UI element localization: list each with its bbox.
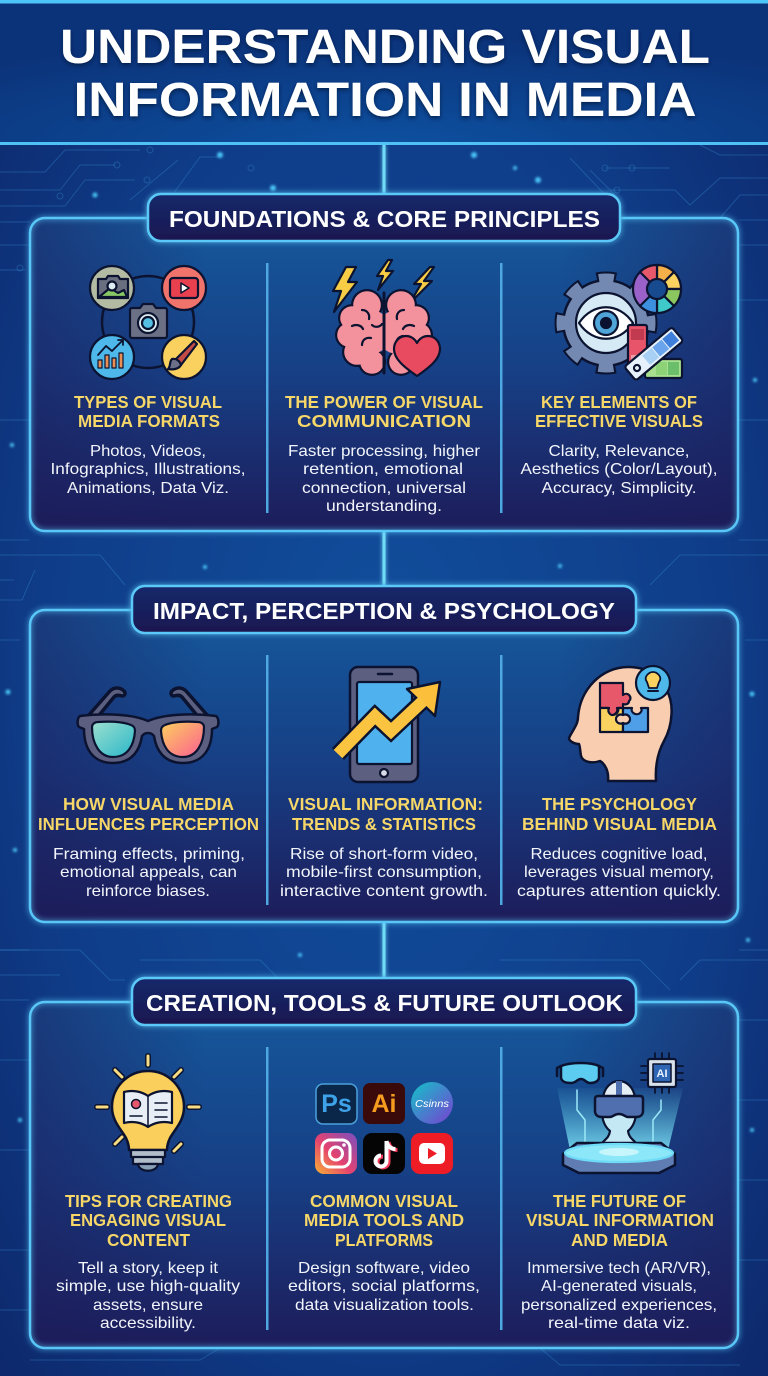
heading: power of visual communication: COMMUNICATION — [297, 411, 471, 431]
icon: tinted glasses — [78, 688, 218, 763]
heading: common visual media tools and platforms: COMMON VISUAL — [310, 1191, 458, 1211]
icon: canva: Csinns — [415, 1099, 449, 1110]
text: trends and statistics: mobile-first consumption, — [286, 864, 482, 881]
text: psychology behind visual media: captures attention quickly. — [517, 883, 721, 900]
heading: psychology behind visual media — [522, 794, 717, 834]
icon: head with puzzle — [569, 666, 672, 781]
heading: future of visual information and media: VISUAL INFORMATION — [526, 1210, 714, 1230]
heading: types of visual media formats — [74, 392, 222, 431]
heading: impact — [132, 586, 636, 633]
icon: tiktok — [363, 1133, 405, 1174]
heading: creation: CREATION, TOOLS & FUTURE OUTLOOK — [146, 990, 623, 1016]
heading: impact: IMPACT, PERCEPTION & PSYCHOLOGY — [153, 598, 615, 624]
panel: creation, tools and future outlook — [30, 978, 738, 1348]
icon: instagram — [315, 1133, 357, 1174]
text: psychology behind visual media: Reduces cognitive load, — [530, 846, 708, 863]
heading: future of visual information and media: AND MEDIA — [571, 1230, 668, 1250]
connector: section 2 to section 3 — [382, 921, 386, 977]
icon: youtube — [411, 1133, 453, 1174]
heading: tips for creating engaging visual content: ENGAGING VISUAL — [70, 1210, 226, 1230]
heading: psychology behind visual media: BEHIND VISUAL MEDIA — [522, 814, 717, 834]
heading: power of visual communication — [285, 392, 483, 431]
heading: visual information trends and statistics: VISUAL INFORMATION: — [288, 794, 483, 814]
text: tips for creating — [56, 1260, 240, 1332]
text: common tools: editors, social platforms, — [288, 1278, 480, 1295]
heading: foundations: FOUNDATIONS & CORE PRINCIPLES — [169, 206, 600, 232]
heading: future of visual information and media: THE FUTURE OF — [553, 1191, 686, 1211]
text: how visual media influences perception: Framing effects, priming, — [53, 846, 245, 863]
heading: types of visual media formats: MEDIA FORMATS — [78, 411, 220, 431]
text: common tools — [288, 1260, 480, 1314]
header banner — [0, 0, 768, 145]
text: future of visual information: real-time data viz. — [548, 1315, 690, 1332]
text: psychology behind visual media — [517, 846, 721, 900]
icon: app logos — [315, 1082, 453, 1174]
heading: visual information trends and statistics: TRENDS & STATISTICS — [292, 814, 476, 834]
text: types of visual media formats — [50, 443, 246, 497]
heading: how visual media influences perception: INFLUENCES PERCEPTION — [38, 814, 259, 834]
text: how visual media influences perception: reinforce biases. — [86, 883, 210, 900]
heading: common visual media tools and platforms — [304, 1191, 464, 1250]
heading: tips for creating engaging visual content — [65, 1191, 232, 1250]
connector: header to section 1 — [382, 145, 386, 195]
text: types of visual media formats: Infographics, Illustrations, — [50, 461, 246, 478]
text: trends and statistics — [280, 846, 488, 900]
text: tips for creating: simple, use high-quality — [56, 1278, 240, 1295]
heading: common visual media tools and platforms: PLATFORMS — [335, 1230, 433, 1250]
heading: foundations — [148, 194, 620, 241]
icon: photoshop: Ps — [321, 1090, 352, 1118]
icon: light bulb with book — [97, 1056, 199, 1171]
heading: tips for creating engaging visual content: CONTENT — [107, 1230, 190, 1250]
text: tips for creating: assets, ensure — [93, 1297, 203, 1314]
text: power of visual communication: connection, universal — [302, 480, 466, 497]
text: trends and statistics: interactive content growth. — [280, 883, 488, 900]
heading: key elements of effective visuals: EFFECTIVE VISUALS — [535, 411, 703, 431]
icon: brain with heart — [333, 260, 440, 376]
icon: visual media formats — [90, 266, 206, 379]
text: types of visual media formats: Animations, Data Viz. — [67, 480, 229, 497]
text: power of visual communication: Faster processing, higher — [288, 443, 481, 460]
heading: how visual media influences perception — [38, 794, 259, 834]
panel: foundations and core principles — [30, 194, 738, 531]
text: power of visual communication — [288, 443, 481, 515]
heading: power of visual communication: THE POWER OF VISUAL — [285, 392, 483, 412]
heading: psychology behind visual media: THE PSYCHOLOGY — [542, 794, 697, 814]
text: key elements of effective visuals: Accuracy, Simplicity. — [542, 480, 696, 497]
text: tips for creating: Tell a story, keep it — [78, 1260, 219, 1277]
text: power of visual communication: retention, emotional — [303, 461, 463, 478]
heading: visual information trends and statistics — [288, 794, 483, 834]
text: types of visual media formats: Photos, Videos, — [90, 443, 206, 460]
text: trends and statistics: Rise of short-form video, — [290, 846, 478, 863]
text: key elements of effective visuals: Aesthetics (Color/Layout), — [520, 461, 718, 478]
panel: impact, perception and psychology — [30, 586, 738, 922]
heading: future of visual information and media — [526, 1191, 714, 1250]
heading: key elements of effective visuals — [535, 392, 703, 431]
heading: key elements of effective visuals: KEY ELEMENTS OF — [541, 392, 697, 412]
text: future of visual information: AI-generated visuals, — [541, 1278, 697, 1295]
icon: illustrator: Ai — [372, 1090, 396, 1118]
title — [60, 21, 710, 127]
text: future of visual information: personalized experiences, — [521, 1297, 717, 1314]
title: INFORMATION IN MEDIA — [74, 74, 696, 127]
text: common tools: data visualization tools. — [295, 1297, 474, 1314]
text: key elements of effective visuals — [520, 443, 718, 497]
text: power of visual communication: understanding. — [326, 498, 442, 515]
text: how visual media influences perception: emotional appeals, can — [60, 864, 237, 881]
text: future of visual information — [521, 1260, 717, 1332]
icon: gear, eye, colour wheel and swatches — [561, 265, 683, 381]
heading: common visual media tools and platforms: MEDIA TOOLS AND — [304, 1210, 464, 1230]
title: UNDERSTANDING VISUAL — [60, 21, 710, 74]
icon: future hologram, VR and AI chip: AI — [656, 1068, 668, 1080]
heading: types of visual media formats: TYPES OF VISUAL — [74, 392, 222, 412]
text: how visual media influences perception — [53, 846, 245, 900]
icon: phone with rising arrow — [338, 667, 440, 782]
heading: how visual media influences perception: HOW VISUAL MEDIA — [63, 794, 234, 814]
text: key elements of effective visuals: Clarity, Relevance, — [548, 443, 690, 460]
text: tips for creating: accessibility. — [100, 1315, 196, 1332]
connector: section 1 to section 2 — [382, 530, 386, 586]
text: future of visual information: Immersive tech (AR/VR), — [527, 1260, 711, 1277]
heading: creation — [132, 978, 636, 1025]
text: psychology behind visual media: leverages visual memory, — [524, 864, 714, 881]
heading: tips for creating engaging visual content: TIPS FOR CREATING — [65, 1191, 232, 1211]
icon: future hologram, VR and AI chip — [557, 1053, 683, 1173]
text: common tools: Design software, video — [298, 1260, 470, 1277]
